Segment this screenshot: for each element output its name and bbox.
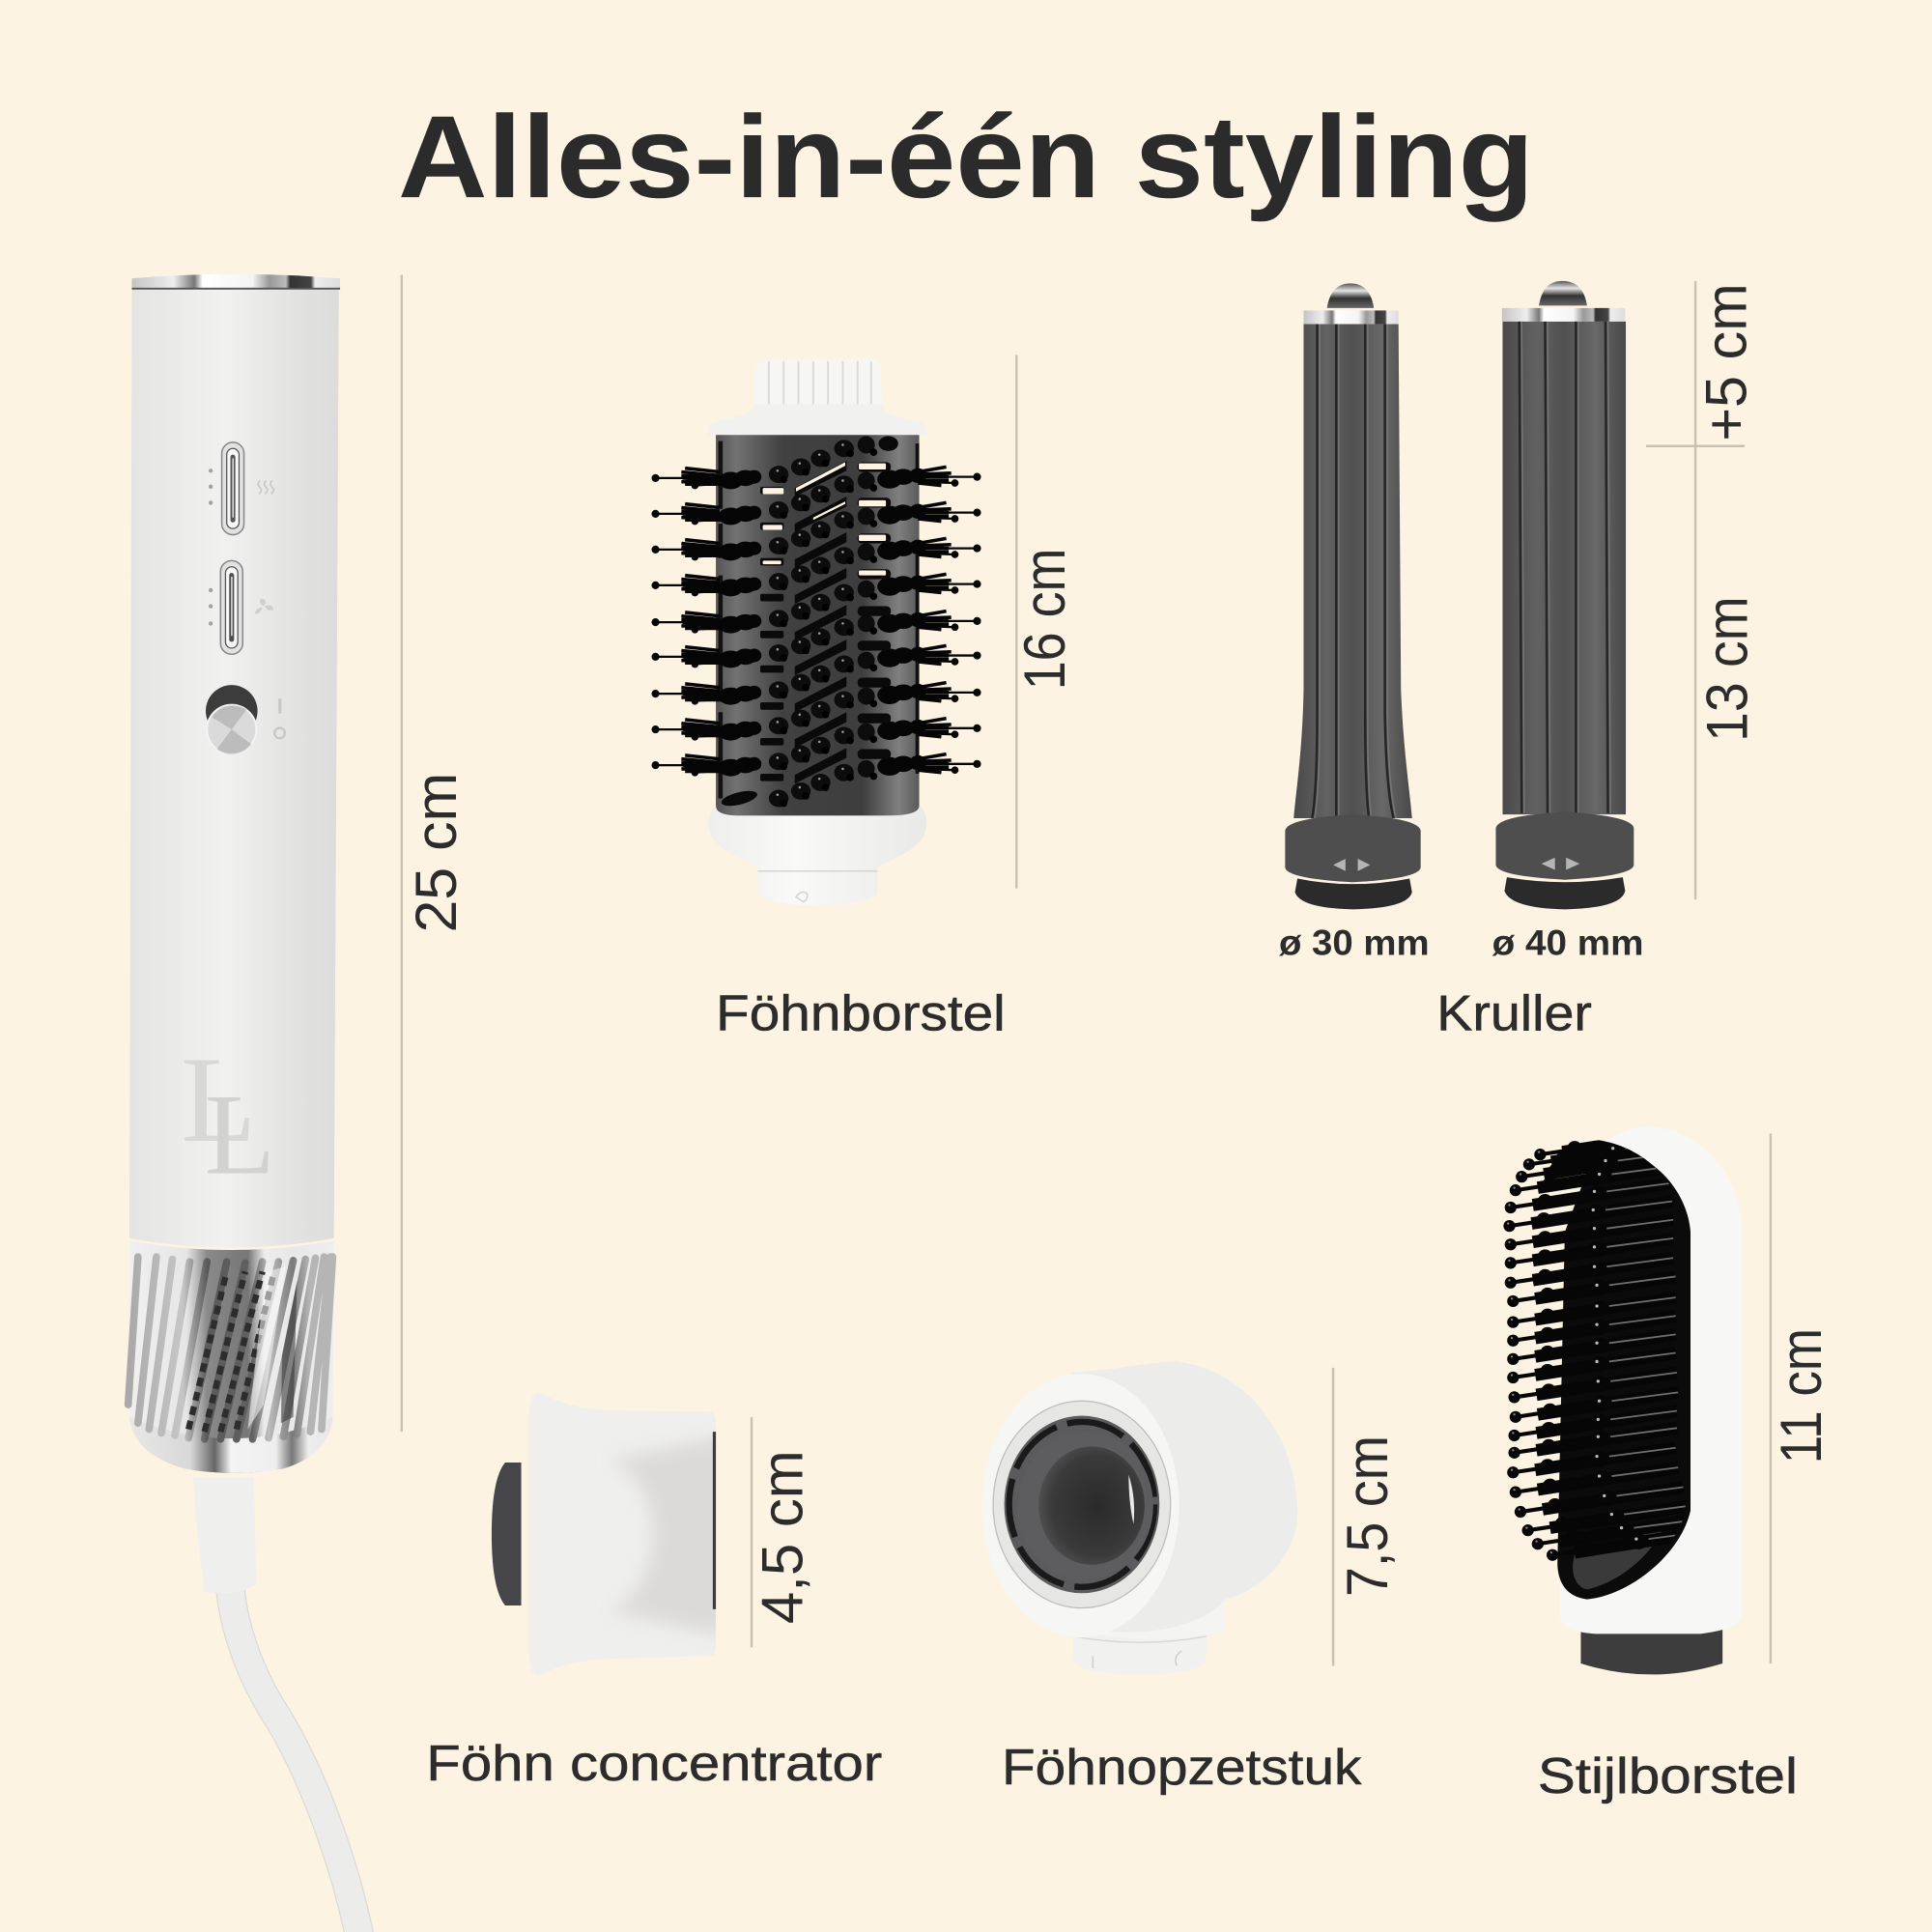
dome tip: [1327, 283, 1374, 308]
shaded facet: [620, 1436, 716, 1635]
neck: [1073, 1597, 1224, 1674]
device: curler 40 mm: [1495, 281, 1634, 909]
logo: LL: L: [205, 1069, 275, 1198]
rear housing: [1072, 1361, 1297, 1633]
concentrator body: [528, 1392, 716, 1676]
power knob: [206, 685, 258, 754]
interior: [1038, 1446, 1145, 1565]
dark rim: [713, 1432, 716, 1609]
barrel: [1502, 322, 1626, 814]
heat level dots: [209, 469, 213, 505]
black base: [1580, 1629, 1722, 1674]
vent grille: [128, 1240, 334, 1473]
bristles and vents: [651, 437, 981, 809]
handle body: [129, 290, 339, 1247]
size label: 30 mm: ø 30 mm: [1279, 923, 1430, 963]
arrows: [1333, 859, 1370, 871]
dimension: 11 cm: 11 cm: [1769, 1328, 1833, 1463]
icon: steam: [258, 480, 273, 494]
chrome top ring: [131, 274, 340, 290]
size label: 40 mm: ø 40 mm: [1492, 923, 1644, 963]
icon: on off: [274, 698, 285, 738]
speed level dots: [209, 588, 213, 626]
chrome ring: [1303, 310, 1399, 324]
base: [1295, 878, 1412, 909]
chrome ring: [1502, 308, 1625, 322]
dark inlet: [492, 1463, 522, 1605]
black panel: [1557, 1145, 1690, 1600]
device: hair dryer concentrator: [492, 1392, 727, 1676]
heat slider button: [222, 442, 244, 535]
logo: LL: L: [182, 1031, 256, 1168]
dimension: 16 cm: 16 cm: [1012, 549, 1077, 690]
highlight: [1128, 1475, 1134, 1524]
label: Föhn concentrator: Föhn concentrator: [426, 1736, 882, 1792]
white housing: [1560, 1126, 1743, 1634]
panel base shading: [1573, 1528, 1663, 1589]
dimension: curler lengths: [1646, 281, 1760, 899]
label: Stijlborstel: Stijlborstel: [1538, 1748, 1798, 1804]
logo: LL: [182, 1031, 275, 1198]
barrel: [1293, 324, 1412, 818]
device: main handle with cord: [128, 274, 359, 1932]
device: round brush: [651, 358, 981, 906]
brush lower collar: [708, 806, 926, 906]
dimension: 25 cm: 25 cm: [404, 773, 469, 933]
title: Alles-in-één styling: [398, 91, 1534, 222]
barrel ribs: [1520, 322, 1608, 813]
brush barrel: [716, 435, 920, 815]
dimension: 4,5 cm: 4,5 cm: [750, 1450, 814, 1624]
label: Kruller: Kruller: [1436, 985, 1592, 1041]
vent slots: [1009, 1422, 1154, 1587]
arrows: [1542, 858, 1579, 870]
collar: [1495, 812, 1634, 880]
bristles: [1503, 1140, 1686, 1561]
icon: fan: [255, 599, 273, 613]
collar: [1285, 814, 1421, 882]
dimension: 7,5 cm: 7,5 cm: [1335, 1435, 1400, 1597]
barrel ribs: [1312, 324, 1394, 818]
power cord: [193, 1477, 359, 1932]
vent ring: [1005, 1416, 1159, 1593]
device: straightening brush: [1503, 1126, 1743, 1674]
label: 13 cm: 13 cm: [1695, 596, 1760, 742]
side slots: [719, 441, 920, 799]
speed slider button: [220, 560, 242, 654]
brush top cap: [708, 358, 926, 435]
device: dryer nozzle: [982, 1361, 1297, 1674]
front face: [982, 1374, 1179, 1637]
cream vent highlights: [763, 462, 886, 576]
metal ring: [993, 1401, 1171, 1608]
label: +5 cm: +5 cm: [1693, 283, 1758, 441]
base: [1504, 877, 1625, 909]
label: Föhnborstel: Föhnborstel: [716, 985, 1006, 1041]
label: Föhnopzetstuk: Föhnopzetstuk: [1002, 1740, 1362, 1796]
dome tip: [1539, 281, 1587, 305]
inner rubber: [1018, 1432, 1153, 1579]
device: curler 30 mm: [1285, 283, 1421, 909]
